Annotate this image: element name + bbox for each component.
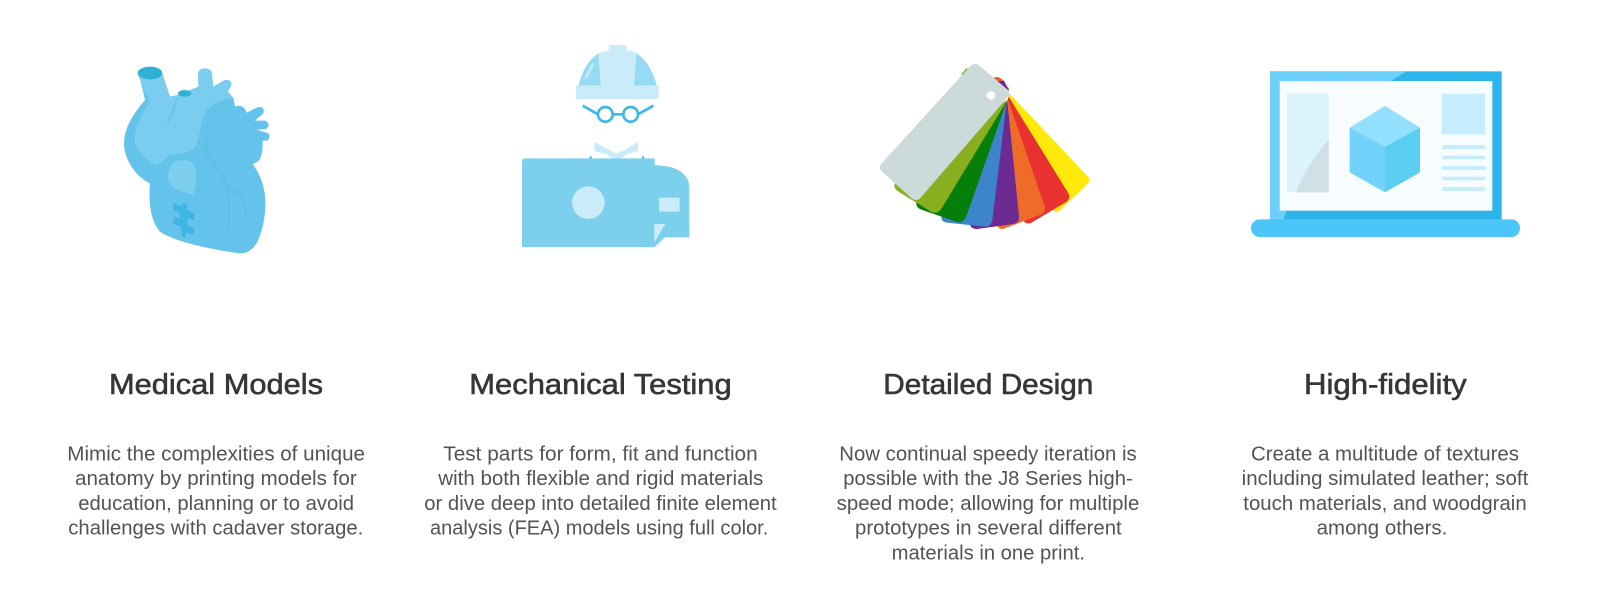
panel: medical models — [67, 67, 365, 539]
icon: laptop with cube — [1251, 71, 1520, 237]
body text: detailed design: materials in one print. — [892, 542, 1085, 564]
body text: high-fidelity — [1242, 444, 1529, 539]
body text: detailed design: prototypes in several different — [855, 517, 1122, 539]
panel: detailed design — [837, 64, 1139, 564]
body text: mechanical testing: or dive deep into detailed finite element — [424, 493, 777, 515]
body text: detailed design: speed mode; allowing for multiple — [837, 493, 1139, 515]
body text: medical models: education, planning or to avoid — [78, 493, 354, 515]
body text: detailed design: possible with the J8 Series high- — [843, 468, 1133, 490]
icon: engineer with hard hat and tablet — [522, 45, 689, 247]
heading: Medical Models: Medical Models — [109, 369, 323, 401]
heading: Mechanical Testing: Mechanical Testing — [469, 369, 732, 401]
panel: high-fidelity — [1242, 71, 1529, 539]
body text: medical models: anatomy by printing models for — [75, 468, 357, 490]
body text: mechanical testing: with both flexible and rigid materials — [437, 468, 763, 490]
body text: detailed design: Now continual speedy iteration is — [839, 444, 1137, 466]
body text: high-fidelity: including simulated leather; soft — [1242, 468, 1529, 490]
body text: medical models: Mimic the complexities of unique — [67, 444, 365, 466]
body text: medical models: challenges with cadaver storage. — [68, 517, 363, 539]
icon: anatomical heart — [124, 67, 270, 253]
body text: detailed design — [837, 444, 1139, 564]
body text: high-fidelity: Create a multitude of textures — [1251, 444, 1519, 466]
panel: mechanical testing — [424, 45, 777, 539]
heading: Detailed Design: Detailed Design — [883, 369, 1093, 401]
body text: high-fidelity: among others. — [1317, 517, 1447, 539]
body text: high-fidelity: touch materials, and woodgrain — [1243, 493, 1527, 515]
icon: colour swatch fan — [880, 64, 1089, 229]
heading: High-fidelity: High-fidelity — [1304, 369, 1468, 401]
body text: mechanical testing: Test parts for form, fit and function — [443, 444, 758, 466]
body text: mechanical testing: analysis (FEA) models using full color. — [430, 517, 768, 539]
body text: medical models — [67, 444, 365, 539]
body text: mechanical testing — [424, 444, 777, 539]
